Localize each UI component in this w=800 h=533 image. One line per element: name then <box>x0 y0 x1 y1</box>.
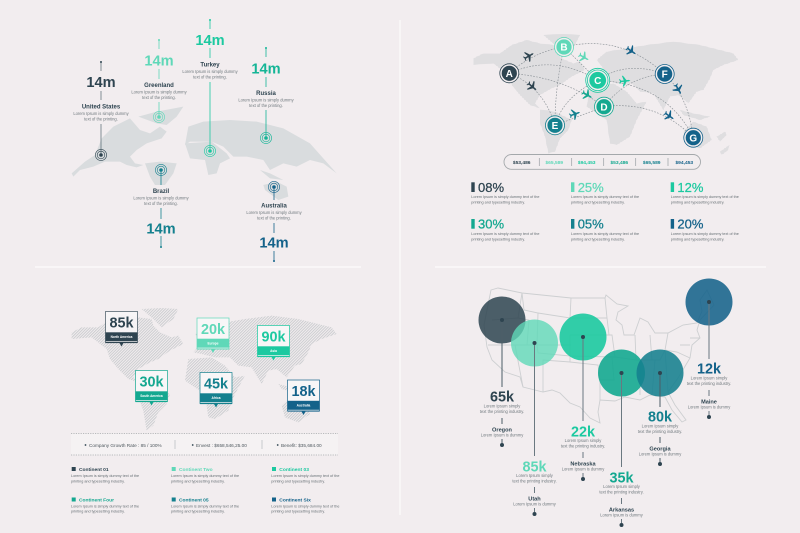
bubble: Utah: Lorem Ipsum is dummy <box>513 502 557 506</box>
bubble: Georgia: text the printing industry. <box>638 429 682 434</box>
pin: Greenland: Lorem Ipsum is simply dummy <box>131 90 188 94</box>
bubble: Arkansas <box>598 350 645 527</box>
panel: flight routes world map <box>471 34 739 241</box>
airplanes <box>521 43 686 123</box>
node C <box>586 68 610 92</box>
node G <box>684 128 703 147</box>
callout: Australia 18k <box>288 380 320 415</box>
info bar: Envest : $658,546,25.00 <box>196 443 247 448</box>
legend: Continent 01: Continent 01 <box>79 467 109 473</box>
bubble: Oregon: Lorem Ipsum is dummy <box>481 432 524 438</box>
stat: 12%: printing and typesetting industry. <box>671 200 724 204</box>
bubble: Utah: 85k <box>522 460 547 476</box>
stat: 05%: printing and typesetting industry. <box>571 237 625 241</box>
node A: A <box>506 69 513 80</box>
stat: 08% <box>471 180 539 204</box>
pin: Turkey <box>182 19 239 157</box>
pin: United States: text of the printing. <box>84 116 118 122</box>
route value pill: $53,486 <box>610 160 628 166</box>
legend: Continent Four: Continent Four <box>79 498 114 504</box>
dotted world map <box>473 34 738 155</box>
legend: Continent 05: Lorem Ipsum is simply dummy text of the <box>171 504 239 508</box>
pin: Turkey: Lorem Ipsum is simply dummy <box>182 69 239 74</box>
callout: Asia 90k: 90k <box>261 330 286 346</box>
bubble: Oregon: text the printing industry. <box>480 409 524 414</box>
callout: Europe 20k: 20k <box>201 322 226 338</box>
pin: Brazil <box>133 164 190 248</box>
info bar: Benefit: $35,684.00 <box>281 443 322 448</box>
pin: Turkey: text of the printing. <box>193 74 227 80</box>
legend: Continent Six: printing and typesetting industry. <box>271 510 325 514</box>
panel: curved world map with country pins <box>72 19 337 262</box>
pin: United States <box>73 61 130 161</box>
pin: Australia: text of the printing. <box>257 216 291 220</box>
panel: USA map with state bubbles <box>478 278 732 527</box>
bubble: Oregon: Oregon <box>492 428 513 434</box>
callout: Australia 18k: Australia <box>297 404 311 408</box>
stat: 25%: Lorem Ipsum is simply dummy text of the <box>571 195 639 199</box>
stat: 05%: Lorem Ipsum is simply dummy text of the <box>571 232 639 236</box>
callout: Europe 20k <box>197 318 229 353</box>
node F <box>655 64 674 84</box>
bubble: Nebraska: Lorem Ipsum simply <box>565 438 602 443</box>
legend: Continent 01: Lorem Ipsum is simply dummy text of the <box>71 474 139 478</box>
curved world map <box>72 107 337 200</box>
callout: Asia 90k: Asia <box>270 349 277 353</box>
dashed flight routes <box>509 44 693 138</box>
legend: Continent 03 <box>271 467 339 484</box>
pin: Russia: 14m <box>251 62 281 78</box>
bubble: Georgia: Georgia <box>649 446 671 452</box>
callout: South America 30k: South America <box>140 394 163 398</box>
pin: United States: United States <box>82 104 121 110</box>
pin: United States: 14m <box>86 75 116 91</box>
route value pill: $65,589 <box>545 160 563 166</box>
stat: 25% <box>571 180 639 204</box>
legend: Continent Six: Lorem Ipsum is simply dummy text of the <box>271 504 339 508</box>
legend: Continent Six <box>271 498 339 514</box>
pin: Australia: Lorem Ipsum is simply dummy <box>246 210 303 215</box>
node E <box>546 116 564 135</box>
node D <box>594 97 614 116</box>
callout: Australia 18k: 18k <box>291 384 316 400</box>
stat: 20%: printing and typesetting industry. <box>671 237 724 241</box>
bubble: Maine: text the printing industry. <box>687 381 731 386</box>
route value pill: $94,453 <box>578 160 596 166</box>
legend: Continent Two <box>171 467 239 484</box>
callout: South America 30k <box>136 370 168 406</box>
bubble: Utah: text the printing industry. <box>512 478 557 484</box>
callout: North America 85k <box>106 312 138 346</box>
bubble: Nebraska: 22k <box>571 424 596 440</box>
pin: Russia <box>238 47 295 144</box>
bubble: Maine <box>686 278 732 419</box>
callout: Africa 45k: 45k <box>204 376 229 392</box>
bubble: Oregon: Lorem Ipsum simply <box>484 404 521 408</box>
stat: 20%: Lorem Ipsum is simply dummy text of the <box>671 232 739 236</box>
bubble: Nebraska <box>560 314 606 481</box>
callout: Europe 20k: Europe <box>208 342 219 346</box>
bubble: Oregon <box>478 296 526 447</box>
bubble: Arkansas: Lorem Ipsum simply <box>603 484 641 489</box>
stat: 08%: Lorem Ipsum is simply dummy text of the <box>471 195 539 199</box>
pin: Australia: Australia <box>261 204 287 210</box>
pin: Greenland: text of the printing. <box>142 95 176 100</box>
legend: Continent 05: printing and typesetting industry. <box>171 510 225 514</box>
pin: Australia: 14m <box>259 236 289 252</box>
node F: F <box>662 70 668 81</box>
bubble: Arkansas: Lorem Ipsum is dummy <box>600 512 644 518</box>
stat: 20% <box>671 217 739 241</box>
bubble: Nebraska: Nebraska <box>570 462 596 468</box>
stat: 30%: Lorem Ipsum is simply dummy text of the <box>471 232 539 236</box>
node C: C <box>594 76 601 87</box>
node B: B <box>560 43 568 54</box>
stat: 05%: 05% <box>578 217 604 232</box>
callout: South America 30k: 30k <box>139 374 164 390</box>
callout: Asia 90k <box>258 326 290 360</box>
info bar <box>71 434 338 455</box>
bubble: Arkansas: 35k <box>609 470 634 486</box>
stat: 25%: 25% <box>578 180 604 195</box>
legend: Continent 03: Lorem Ipsum is simply dummy text of the <box>271 474 339 478</box>
pin: Greenland: Greenland <box>144 83 174 89</box>
pin: Greenland: 14m <box>144 54 174 70</box>
bubble: Maine: Lorem Ipsum simply <box>691 376 728 380</box>
node E: E <box>552 121 559 132</box>
bubble: Utah: Utah <box>528 496 541 502</box>
pin: Australia <box>246 181 303 262</box>
route value pill: $65,589 <box>643 160 661 166</box>
pin: Russia: Russia <box>256 91 276 97</box>
pin: Brazil: text of the printing. <box>144 201 178 206</box>
legend: Continent 01 <box>71 467 139 484</box>
stat: 12% <box>671 180 739 204</box>
node A <box>500 64 519 83</box>
pin: Turkey: 14m <box>195 33 225 49</box>
legend: Continent Four: printing and typesetting industry. <box>71 510 125 514</box>
callout: North America 85k: North America <box>111 335 133 339</box>
pin: Russia: text of the printing. <box>249 103 283 108</box>
stat: 30% <box>471 217 539 241</box>
info bar: Company Growth Rate : 85 / 100% <box>89 443 162 448</box>
bubble: Nebraska: Lorem Ipsum is dummy <box>562 466 605 472</box>
hatched world map <box>72 308 337 431</box>
stat: 08%: printing and typesetting industry. <box>471 200 525 204</box>
stat: 12%: Lorem Ipsum is simply dummy text of the <box>671 195 739 199</box>
stat: 25%: printing and typesetting industry. <box>571 200 625 204</box>
stat: 08%: 08% <box>478 180 504 195</box>
legend: Continent Two: printing and typesetting industry. <box>171 480 225 484</box>
pin: Brazil: 14m <box>146 222 176 238</box>
pin: Greenland <box>131 39 188 123</box>
node G: G <box>689 133 697 144</box>
legend: Continent Four: Lorem Ipsum is simply dummy text of the <box>71 504 139 508</box>
stat: 20%: 20% <box>677 217 704 232</box>
bubble: Utah <box>511 320 558 516</box>
callout: Africa 45k <box>200 372 232 408</box>
bubble: Arkansas: Arkansas <box>609 508 634 514</box>
legend: Continent Four <box>71 498 139 514</box>
legend: Continent 05 <box>171 498 239 514</box>
legend: Continent Two: Lorem Ipsum is simply dummy text of the <box>171 474 239 478</box>
bubble: Georgia: 80k <box>648 410 673 426</box>
legend: Continent 03: Continent 03 <box>279 467 309 473</box>
stat: 30%: 30% <box>478 217 504 232</box>
route value pill <box>504 154 700 169</box>
bubble: Georgia <box>636 350 684 466</box>
legend: Continent Two: Continent Two <box>179 467 213 473</box>
pin: Brazil: Lorem Ipsum is simply dummy <box>133 196 190 200</box>
route value pill: $53,486 <box>513 160 531 166</box>
bubble: Georgia: Lorem Ipsum is dummy <box>639 452 682 456</box>
bubble: Maine: Maine <box>701 400 717 406</box>
legend: Continent 01: printing and typesetting industry. <box>71 480 125 484</box>
pin: Turkey: Turkey <box>200 62 220 68</box>
bubble: Oregon: 65k <box>490 390 515 406</box>
stat: 05% <box>571 217 639 241</box>
legend: Continent Six: Continent Six <box>279 498 311 504</box>
bubble: Georgia: Lorem Ipsum simply <box>642 424 679 428</box>
legend: Continent 05: Continent 05 <box>179 498 209 504</box>
node B <box>554 38 574 56</box>
bubble: Nebraska: text the printing industry. <box>561 444 605 448</box>
USA outline map <box>484 288 714 423</box>
legend: Continent 03: printing and typesetting industry. <box>271 480 325 484</box>
bubble: Maine: Lorem Ipsum is dummy <box>688 404 731 410</box>
route value pill: $94,453 <box>675 160 693 166</box>
panel: continents hatched map <box>71 308 339 514</box>
bubble: Maine: 12k <box>697 362 722 378</box>
bubble: Utah: Lorem Ipsum simply <box>516 473 554 478</box>
pin: Russia: Lorem Ipsum is simply dummy <box>238 98 295 102</box>
callout: North America 85k: 85k <box>109 316 134 332</box>
pin: United States: Lorem Ipsum is simply dummy <box>73 111 130 116</box>
callout: Africa 45k: Africa <box>211 396 221 400</box>
node D: D <box>600 102 608 113</box>
pin: Brazil: Brazil <box>153 189 170 195</box>
stat: 12%: 12% <box>677 180 704 195</box>
stat: 30%: printing and typesetting industry. <box>471 237 525 241</box>
bubble: Arkansas: text the printing industry. <box>599 490 644 494</box>
